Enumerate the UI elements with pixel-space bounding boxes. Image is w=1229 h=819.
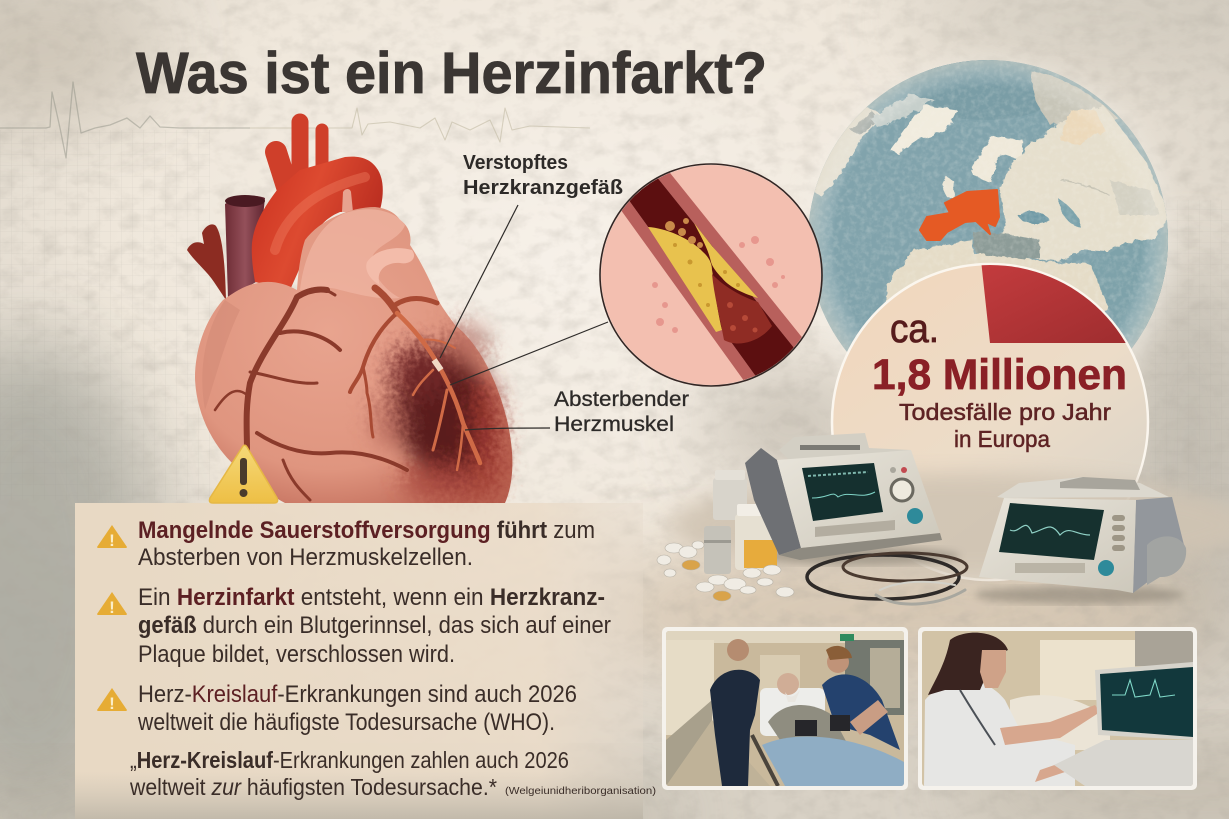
- stretcher and patient: [760, 688, 825, 736]
- fade behind equipment: [670, 473, 1229, 577]
- debris: [665, 218, 703, 248]
- lumen: [630, 178, 794, 376]
- stat: 1,8 Millionen: 1,8 Millionen: [872, 351, 1127, 399]
- bullet text 3: [137, 681, 577, 736]
- globe: [808, 60, 1176, 360]
- artery cross-section magnifier: [599, 163, 823, 387]
- stat caption: Todesfälle pro Jahr: [899, 399, 1111, 425]
- bullet text 2: Ein Herzinfarkt entsteht, wenn ein Herzkranz-: [138, 584, 605, 611]
- bullet text 2: Plaque bildet, verschlossen wird.: [138, 641, 455, 668]
- bullet icon 1: [97, 525, 127, 550]
- speckle: [652, 236, 785, 333]
- leader lines: [440, 205, 608, 430]
- paramedic 1: [710, 670, 760, 786]
- medical equipment group: [657, 433, 1186, 604]
- stethoscope: [807, 553, 967, 604]
- blockage marker: [434, 360, 441, 370]
- bullet text 2: [138, 584, 611, 668]
- bullet text 1: Absterben von Herzmuskelzellen.: [138, 544, 473, 571]
- stat caption: [899, 399, 1111, 452]
- label: Absterbender Herzmuskel: [554, 388, 689, 436]
- footnote: (Welgeiunidheriborganisation): [505, 786, 656, 797]
- doctor: [924, 680, 1075, 786]
- photo: doctor at monitor: [918, 627, 1197, 790]
- stat: ca.: ca.: [890, 307, 939, 351]
- infarct area: [370, 321, 509, 502]
- ultrasound monitor: [1095, 662, 1193, 740]
- pie callout: deaths per year in Europe: [832, 260, 1150, 580]
- quote: weltweit zur häufigsten Todesursache.*: [129, 774, 497, 800]
- Europe highlighted: [920, 190, 999, 240]
- bullet text 3: Herz-Kreislauf-Erkrankungen sind auch 2026: [138, 681, 577, 708]
- icon: large warning triangle: [209, 445, 278, 503]
- monitor 2: [979, 477, 1186, 593]
- bullet icon 3: [97, 688, 127, 713]
- bullet text 2: gefäß durch ein Blutgerinnsel, das sich auf einer: [138, 612, 611, 639]
- pills: [657, 541, 794, 601]
- bullet text 3: weltweit die häufigste Todesursache (WHO).: [137, 709, 555, 736]
- paramedic 2: [822, 674, 900, 750]
- label: Verstopftes Herzkranzgefäß: Herzkranzgefäß: [463, 177, 623, 199]
- label: Absterbender Herzmuskel: Herzmuskel: [554, 413, 674, 436]
- stat caption: in Europa: [954, 426, 1050, 452]
- clot: [712, 274, 772, 344]
- shadows: [760, 547, 960, 565]
- coronary vessels: [215, 288, 480, 500]
- bullet text 1: Mangelnde Sauerstoffversorgung führt zum: [138, 517, 595, 544]
- bullet icon 2: [97, 592, 127, 617]
- main text panel: [75, 503, 656, 819]
- label: Verstopftes Herzkranzgefäß: Verstopftes: [463, 152, 568, 174]
- bottles: [704, 470, 777, 574]
- quote: „Herz-Kreislauf-Erkrankungen zahlen auch 2026: [130, 747, 569, 773]
- plaque: [648, 227, 722, 332]
- vessel walls: [622, 201, 756, 380]
- title: Was ist ein Herzinfarkt?: [136, 41, 767, 106]
- quote: [129, 747, 569, 800]
- heart body: [195, 207, 512, 503]
- label: Absterbender Herzmuskel: Absterbender: [554, 388, 689, 411]
- pie wedge: [982, 265, 1126, 343]
- heart illustration: [187, 122, 512, 503]
- ECG line: [0, 82, 590, 158]
- aorta and vessels: [187, 122, 383, 300]
- bullet icon 1: !: [109, 531, 115, 550]
- monitor 1: [745, 433, 942, 560]
- bullet text 1: [138, 517, 595, 571]
- bullet icon 3: !: [109, 694, 115, 713]
- label: Verstopftes Herzkranzgefäß: [463, 152, 623, 199]
- photo: emergency transport: [662, 627, 908, 790]
- bullet icon 2: !: [109, 598, 115, 617]
